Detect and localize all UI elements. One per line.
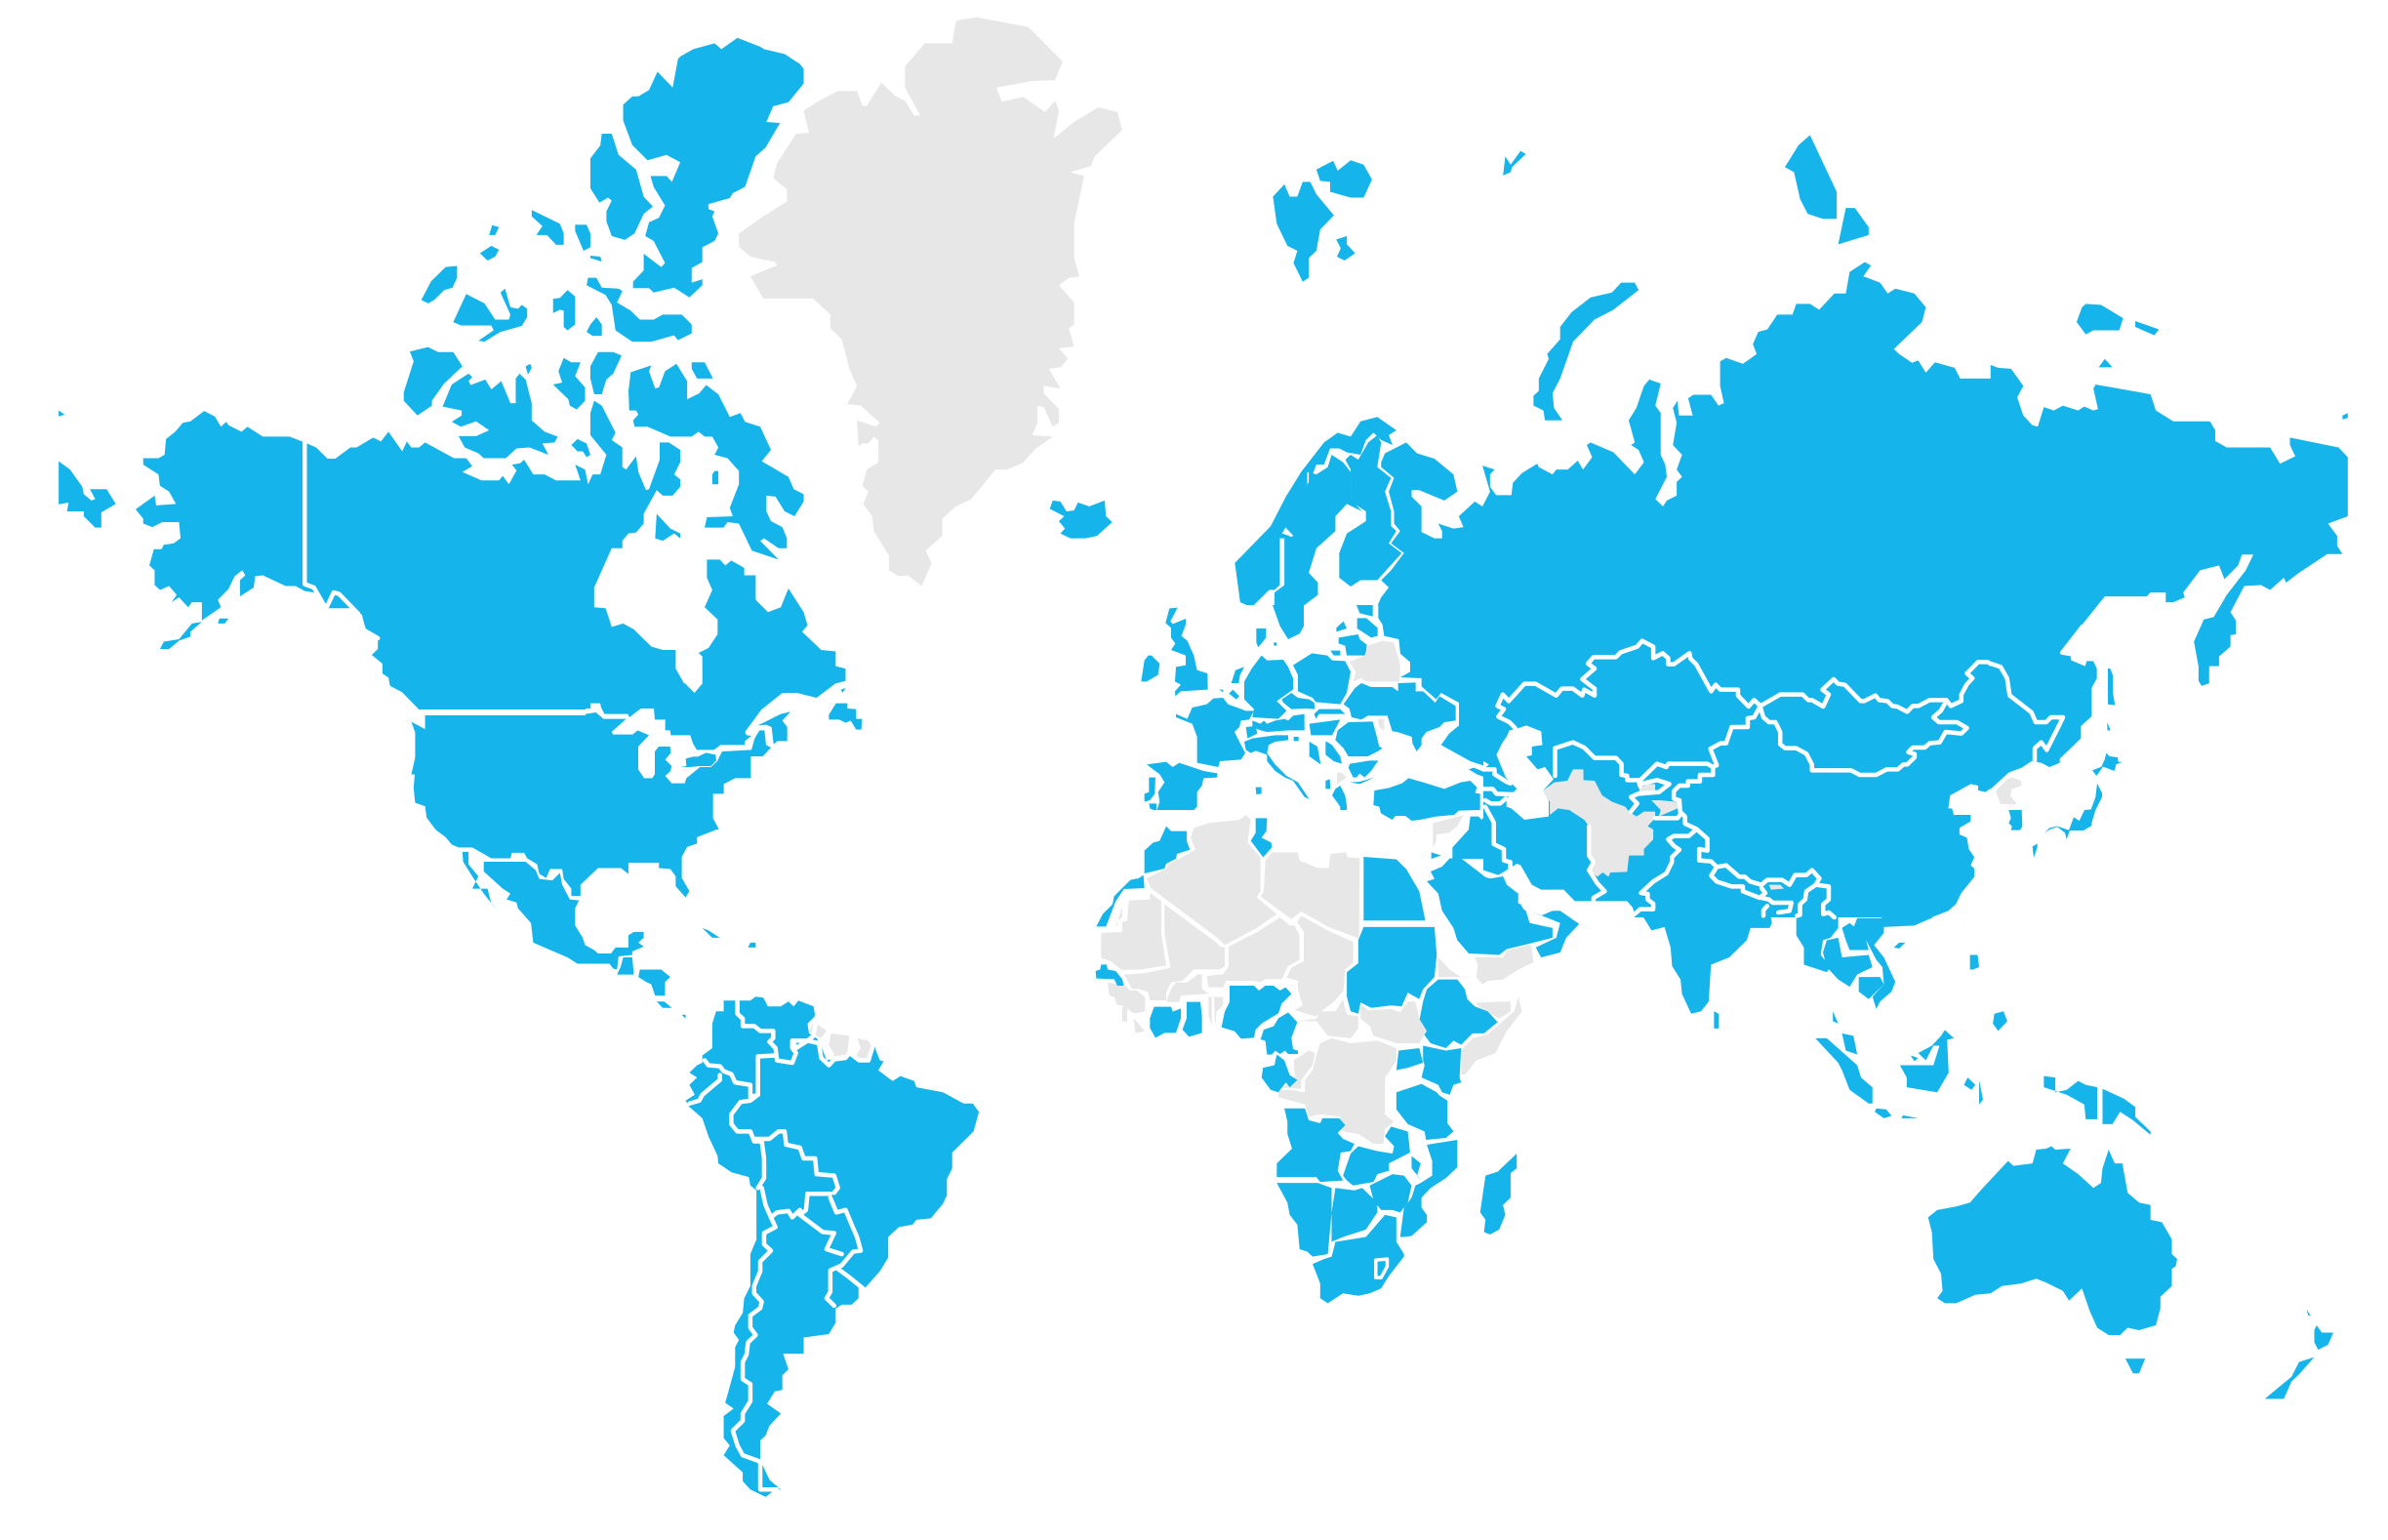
Honshu [2044, 784, 2102, 839]
Black Sea east shore [1483, 735, 1489, 769]
United Kingdom [1165, 608, 1208, 696]
Uganda [1396, 1048, 1423, 1071]
Namibia [1276, 1183, 1332, 1257]
Vietnam [1853, 918, 1895, 1009]
Moldova [1378, 719, 1384, 730]
Atlantic Canada [829, 704, 862, 730]
Gabon [1262, 1055, 1297, 1092]
Mauritania [1101, 893, 1166, 970]
Russian Far East and northeast China [1991, 625, 2097, 789]
James Bay tip [685, 683, 703, 693]
Americas: southern section [414, 768, 979, 1497]
Egypt [1363, 857, 1426, 920]
Greenland [739, 18, 1122, 587]
France [1176, 698, 1254, 767]
Ivory Coast [1150, 1007, 1181, 1037]
West and North Africa [1083, 810, 1376, 1055]
Great Lakes, border and Atlantic [586, 683, 878, 830]
South Africa [1313, 1215, 1404, 1303]
Mexico [484, 862, 644, 970]
Australia [1928, 1146, 2177, 1335]
Syria [1433, 815, 1464, 847]
Mozambique [1400, 1140, 1457, 1236]
Austria [1252, 719, 1288, 732]
Germany [1244, 656, 1293, 719]
United States northern section [412, 715, 762, 774]
Kenya [1422, 1045, 1461, 1095]
Northeast Asia and Japan [1991, 625, 2186, 878]
South America [686, 996, 979, 1497]
North America and Greenland: northern section [59, 18, 1122, 774]
United States southern section [414, 768, 750, 898]
Canadian Arctic islands [404, 38, 804, 559]
Ontario peninsula [680, 752, 716, 767]
Hainan [1894, 943, 1905, 949]
Algeria [1147, 815, 1276, 945]
Niger [1207, 917, 1300, 988]
Botswana [1332, 1188, 1377, 1241]
Myanmar [1797, 911, 1839, 972]
Cambodia [1859, 977, 1883, 999]
Thailand [1823, 938, 1873, 987]
Kyrgyz enclave [1639, 784, 1655, 793]
Israel [1432, 852, 1441, 859]
Laos [1842, 923, 1869, 950]
Sweden south [1273, 605, 1304, 639]
Iceland [1050, 501, 1113, 539]
Republic of Congo [1278, 1050, 1315, 1089]
Belarus [1350, 641, 1400, 681]
Asian borders [1483, 641, 2063, 917]
Somalia [1461, 996, 1522, 1075]
Hungary and Slovenia [1288, 714, 1340, 735]
DR Congo [1278, 1038, 1396, 1144]
Yemen [1475, 945, 1533, 985]
Netherlands and Belgium [1219, 667, 1244, 700]
Great Lakes and northeastern North America [586, 683, 878, 830]
Lesotho outline [1376, 1259, 1387, 1277]
Alaska and Canada mainland [136, 401, 845, 752]
Poland [1293, 653, 1351, 705]
Russia [1376, 263, 2348, 771]
Western Russia [1378, 605, 1522, 813]
Bhutan [1769, 885, 1784, 890]
Morocco [1145, 827, 1190, 873]
Pacific coast of China [1931, 750, 2069, 917]
Hokkaido [2092, 753, 2123, 776]
Spain [1147, 762, 1217, 821]
Ukraine [1344, 682, 1456, 751]
New Guinea [2044, 1076, 2151, 1135]
Tunisia [1251, 818, 1272, 857]
South Korea [2008, 810, 2022, 831]
Caspian Sea [1496, 725, 1554, 820]
Persian Gulf and Arabian Sea [1483, 864, 1635, 917]
Zimbabwe [1370, 1174, 1411, 1212]
Saudi Arabia [1427, 858, 1553, 954]
Zambia [1343, 1126, 1410, 1186]
Europe [1132, 605, 1522, 859]
North Korea [1996, 778, 2022, 804]
Alaska peninsula islands [59, 411, 228, 649]
Southern Asia, Indonesia, Oceania base [1635, 911, 2333, 1398]
Czechia and Slovakia [1281, 693, 1345, 719]
Iraq [1452, 813, 1506, 859]
Western Sahara [1096, 875, 1145, 926]
Svalbard and Arctic islands [1273, 136, 2348, 421]
Guianas [809, 1021, 872, 1060]
Turkey [1373, 778, 1480, 821]
Baja California [463, 852, 499, 912]
Sri Lanka [1714, 1011, 1719, 1029]
Sweden [1275, 455, 1362, 639]
South American borders [689, 1001, 872, 1489]
Tasmania [2125, 1358, 2145, 1373]
Nigeria [1222, 986, 1291, 1038]
South Sudan [1360, 1001, 1427, 1043]
Togo and Benin [1208, 997, 1223, 1027]
Ghana [1183, 1002, 1202, 1036]
Romania [1335, 721, 1383, 756]
East and Southern Africa, Arabia [1262, 857, 1579, 1303]
Balkans [1294, 737, 1378, 815]
Oman [1529, 911, 1579, 957]
Ethiopia [1419, 980, 1498, 1048]
Finland [1339, 435, 1401, 587]
Sudan [1347, 927, 1437, 1014]
Maine [758, 711, 790, 745]
Kyushu [2033, 843, 2038, 858]
Western Sahara interior [1115, 908, 1122, 925]
China southern coast [1881, 911, 1957, 927]
Italy [1244, 735, 1310, 799]
Madagascar [1480, 1154, 1517, 1235]
Chad [1286, 915, 1354, 1017]
Turkmenistan and Afghanistan [1543, 769, 1655, 876]
Corsica [1256, 788, 1262, 794]
Switzerland [1246, 726, 1257, 739]
Portugal [1145, 778, 1156, 812]
Alaska border [304, 442, 378, 638]
Libya [1261, 852, 1359, 939]
India [1635, 911, 1772, 1014]
Sakhalin [2107, 669, 2115, 730]
Eritrea [1438, 957, 1461, 977]
Norway [1234, 417, 1396, 607]
Burkina Faso [1166, 974, 1208, 1002]
Baltic states [1274, 605, 1378, 656]
Tanzania [1396, 1084, 1453, 1140]
Ireland [1141, 656, 1159, 681]
Mali [1124, 905, 1225, 1000]
Senegal [1096, 964, 1124, 986]
Central and East Asia [1483, 625, 2069, 917]
Malawi [1411, 1156, 1422, 1181]
Russia China border [1991, 664, 2063, 763]
Nova Scotia fragment [841, 688, 846, 693]
Angola [1276, 1109, 1355, 1182]
Cameroon [1261, 1012, 1298, 1055]
Tajikistan [1639, 800, 1678, 817]
Guinea, Sierra Leone, Liberia [1108, 983, 1145, 1033]
Georgia [1469, 768, 1490, 779]
Central America and Caribbean [617, 928, 755, 1019]
New Zealand [2265, 1310, 2333, 1398]
Indonesia and Philippines [1815, 954, 2007, 1118]
Central African Republic [1297, 999, 1358, 1038]
Northern Eurasia [1234, 136, 2348, 771]
Denmark [1256, 628, 1266, 647]
